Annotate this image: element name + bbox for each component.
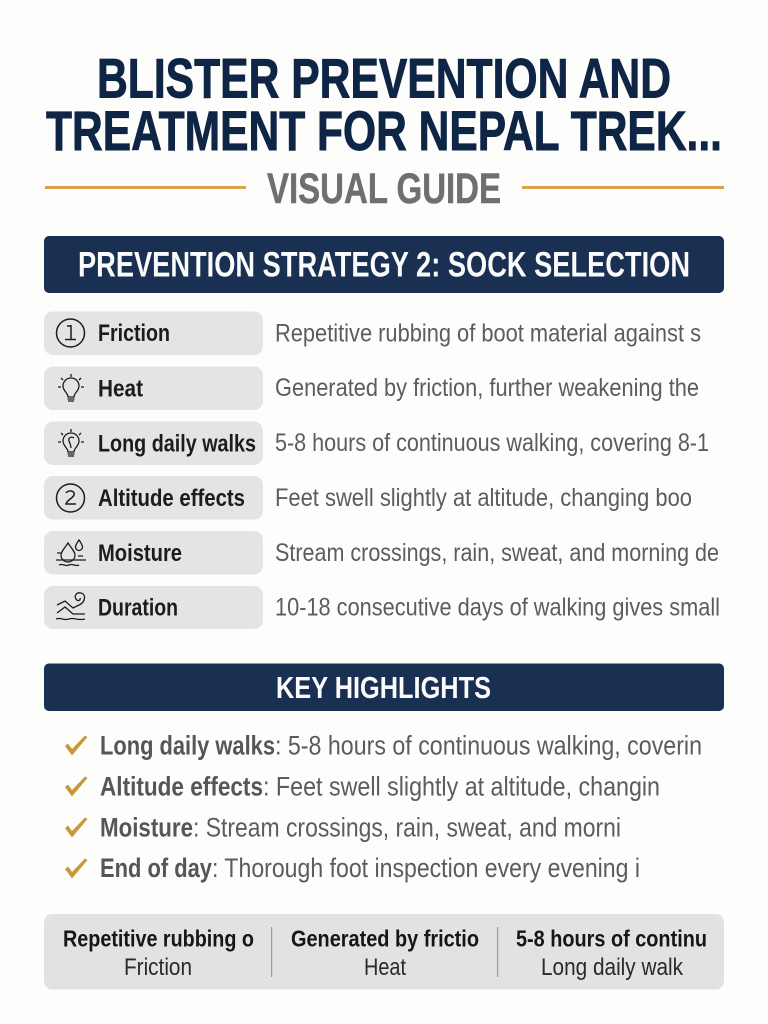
highlight: end of day: End of day [100, 853, 212, 883]
section header: sock selection [44, 236, 724, 293]
stat: long daily walk [516, 926, 707, 981]
subtitle: visual guide: VISUAL GUIDE [267, 165, 501, 213]
row: friction: Friction [98, 320, 170, 347]
highlight: altitude effects [65, 772, 660, 802]
row: heat: Generated by friction, further weakening the [275, 374, 699, 402]
row: altitude effects: Feet swell slightly at altitude, changing boo [275, 484, 692, 512]
row: friction [44, 312, 701, 355]
highlight: moisture [65, 812, 621, 842]
key highlights list [65, 730, 702, 883]
stat: friction [63, 926, 254, 981]
title [46, 46, 722, 162]
highlight: moisture: : Stream crossings, rain, sweat, and morni [193, 812, 621, 842]
stat: friction: Repetitive rubbing o [63, 926, 254, 952]
row: moisture [44, 531, 719, 574]
icon: wave and spiral [56, 593, 85, 620]
row: altitude effects [44, 476, 692, 520]
section header: key highlights [44, 664, 724, 711]
row: long daily walks: Long daily walks [98, 430, 256, 458]
highlight: moisture: Moisture [100, 812, 193, 842]
row: duration: Duration [98, 594, 178, 622]
stat: heat [291, 926, 479, 981]
row: duration [44, 586, 720, 629]
stat: friction: Friction [124, 954, 192, 981]
row: heat: Heat [98, 376, 143, 402]
highlight: end of day [65, 853, 640, 883]
icon: light bulb [58, 374, 84, 401]
row: moisture: Moisture [98, 540, 182, 567]
icon: numbered circle 2 [56, 484, 84, 512]
stat: long daily walk: Long daily walk [541, 954, 684, 981]
highlight: long daily walks [65, 730, 702, 760]
subtitle: visual guide [45, 165, 724, 213]
highlight: altitude effects: : Feet swell slightly at altitude, changin [263, 772, 660, 802]
highlight: end of day: : Thorough foot inspection every evening i [212, 853, 640, 883]
row: long daily walks [44, 422, 709, 465]
icon: numbered circle 1 [56, 319, 84, 347]
stat: heat: Generated by frictio [291, 926, 479, 952]
highlight: altitude effects: Altitude effects [100, 772, 263, 802]
stat: long daily walk: 5-8 hours of continu [516, 926, 707, 952]
icon: water drops [56, 540, 86, 566]
icon: light bulb with filament [58, 429, 84, 456]
highlight: long daily walks: : 5-8 hours of continuous walking, coverin [275, 730, 702, 760]
panel: factor list [44, 312, 720, 629]
row: friction: Repetitive rubbing of boot material against s [275, 320, 701, 348]
row: altitude effects: Altitude effects [98, 485, 245, 512]
row: long daily walks: 5-8 hours of continuous walking, covering 8-1 [275, 429, 709, 457]
highlight: long daily walks: Long daily walks [100, 730, 275, 760]
row: heat [44, 366, 699, 410]
stats panel [44, 914, 724, 990]
section header: key highlights: KEY HIGHLIGHTS [276, 670, 491, 705]
stat: heat: Heat [364, 954, 406, 981]
